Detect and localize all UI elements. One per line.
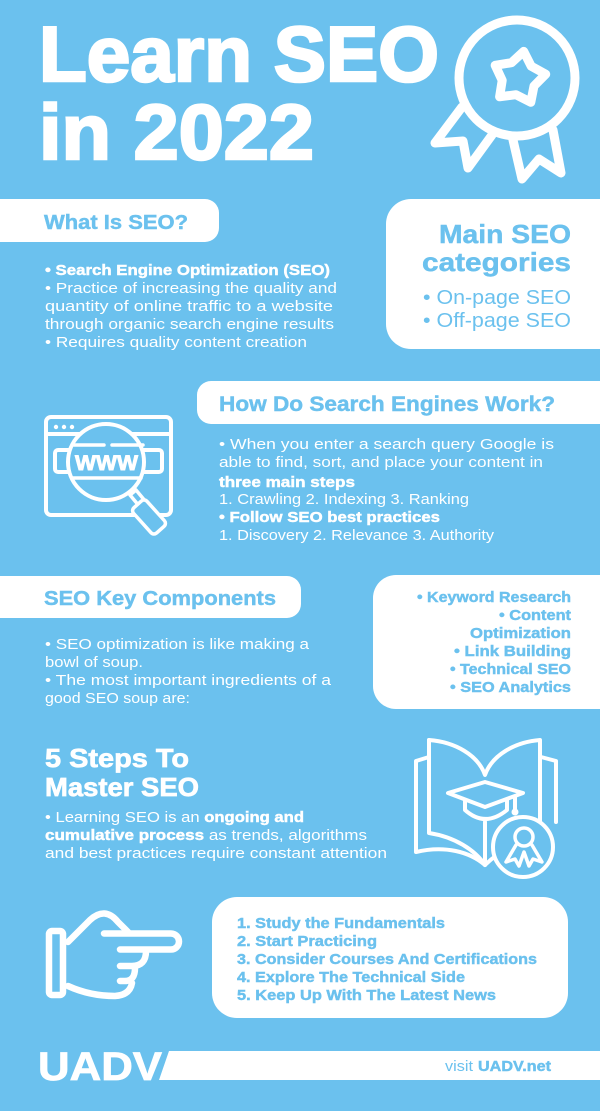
title bbox=[39, 10, 439, 176]
panel: five steps list: 3. Consider Courses And Certifications bbox=[237, 951, 537, 968]
text block: how search engines work: • Follow SEO best practices bbox=[219, 509, 440, 526]
text block: learning SEO: and best practices require constant attention bbox=[45, 845, 387, 862]
panel: key components list: • SEO Analytics bbox=[450, 679, 571, 696]
icon: award ribbon with star bbox=[435, 20, 575, 179]
text block: what is SEO bbox=[45, 262, 337, 351]
text block: what is SEO: quantity of online traffic to a website bbox=[45, 298, 333, 315]
text block: how search engines work bbox=[219, 436, 554, 544]
footer: white strip with website: UADV.net bbox=[478, 1058, 551, 1075]
panel: how search engines work heading bbox=[197, 381, 600, 424]
icon: pointing hand bbox=[49, 913, 179, 996]
footer: white strip with website: visit bbox=[445, 1058, 474, 1075]
icon: browser window with magnifier bbox=[46, 417, 171, 536]
panel: what is SEO heading bbox=[0, 199, 219, 242]
text block: what is SEO: • Practice of increasing the quality and bbox=[45, 280, 337, 297]
panel: main SEO categories bbox=[386, 199, 600, 349]
panel: main SEO categories: Main SEO bbox=[439, 219, 571, 249]
panel: how search engines work heading: How Do Search Engines Work? bbox=[219, 393, 555, 416]
panel: five steps list: 1. Study the Fundamentals bbox=[237, 915, 445, 932]
icon: open book with graduation cap and badge bbox=[416, 740, 556, 877]
text block: learning SEO: cumulative process as trends, algorithms bbox=[45, 827, 367, 844]
panel: key components list: • Technical SEO bbox=[450, 661, 571, 678]
text block: SEO soup: good SEO soup are: bbox=[45, 690, 190, 707]
footer: UADV logo: UADV bbox=[38, 1045, 162, 1089]
panel: SEO key components heading bbox=[0, 576, 301, 618]
panel: key components list bbox=[373, 575, 600, 709]
text block: SEO soup: bowl of soup. bbox=[45, 654, 143, 671]
text block: SEO soup: • The most important ingredients of a bbox=[45, 672, 332, 689]
footer: white strip with website bbox=[159, 1051, 600, 1080]
text block: learning SEO bbox=[45, 809, 387, 862]
text block: how search engines work: 1. Crawling 2. Indexing 3. Ranking bbox=[219, 491, 469, 508]
panel: key components list: Optimization bbox=[470, 625, 571, 642]
panel: key components list: • Link Building bbox=[454, 643, 571, 660]
text block: what is SEO: • Search Engine Optimization (SEO) bbox=[45, 262, 330, 279]
heading: 5 steps to master SEO: Master SEO bbox=[45, 772, 199, 802]
text block: how search engines work: able to find, sort, and place your content in bbox=[219, 454, 543, 471]
text block: how search engines work: • When you enter a search query Google is bbox=[219, 436, 554, 453]
panel: SEO key components heading: SEO Key Components bbox=[44, 588, 276, 610]
panel: key components list: • Keyword Research bbox=[417, 589, 571, 606]
panel: main SEO categories: • On-page SEO bbox=[423, 287, 571, 309]
text block: learning SEO: • Learning SEO is an ongoing and bbox=[45, 809, 304, 826]
text block: how search engines work: 1. Discovery 2. Relevance 3. Authority bbox=[219, 527, 495, 544]
panel: five steps list bbox=[212, 897, 568, 1018]
panel: five steps list: 4. Explore The Technical Side bbox=[237, 969, 465, 986]
heading: 5 steps to master SEO bbox=[45, 743, 199, 802]
text block: how search engines work: three main steps bbox=[219, 474, 355, 491]
heading: 5 steps to master SEO: 5 Steps To bbox=[45, 743, 189, 773]
title: Learn SEO bbox=[39, 10, 439, 98]
panel: what is SEO heading: What Is SEO? bbox=[44, 212, 188, 234]
text block: SEO soup bbox=[45, 636, 332, 707]
panel: five steps list: 5. Keep Up With The Latest News bbox=[237, 987, 496, 1004]
panel: key components list: • Content bbox=[499, 607, 571, 624]
panel: main SEO categories: categories bbox=[422, 247, 571, 277]
title: in 2022 bbox=[39, 88, 314, 176]
panel: five steps list: 2. Start Practicing bbox=[237, 933, 377, 950]
text block: what is SEO: • Requires quality content creation bbox=[45, 334, 307, 351]
text block: SEO soup: • SEO optimization is like making a bbox=[45, 636, 310, 653]
icon: browser window with magnifier: WWW bbox=[75, 452, 138, 475]
text block: what is SEO: through organic search engine results bbox=[45, 316, 334, 333]
panel: main SEO categories: • Off-page SEO bbox=[423, 310, 571, 332]
